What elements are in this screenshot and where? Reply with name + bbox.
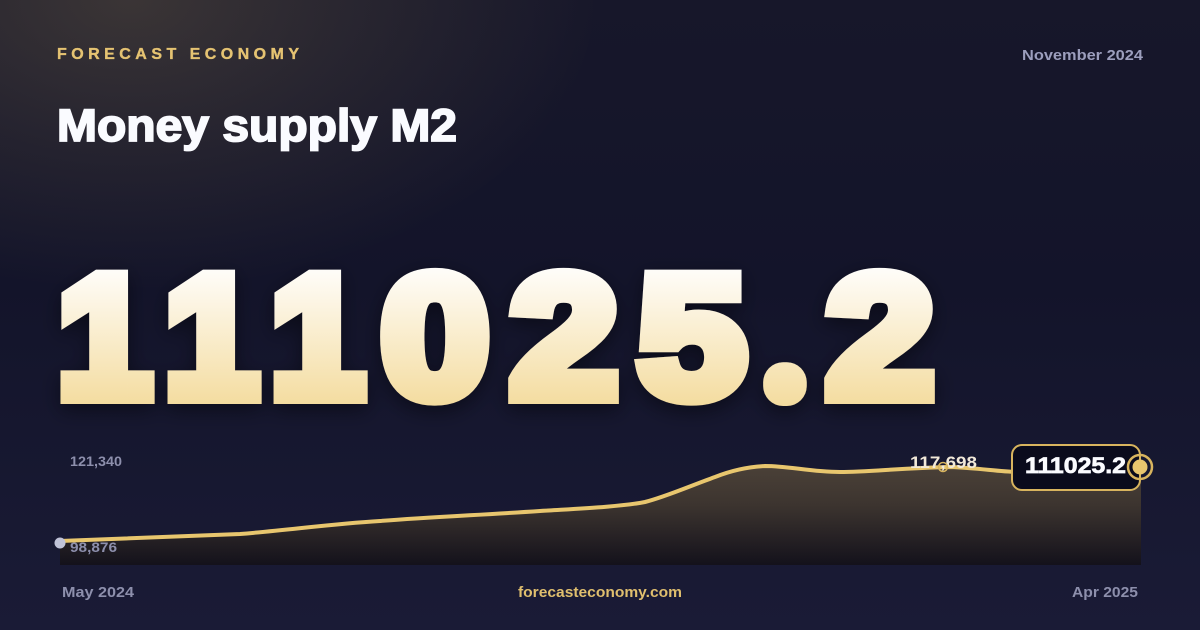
current value badge [1012,445,1140,490]
peak marker [938,462,948,472]
big value [58,241,934,433]
website: forecasteconomy.com [518,585,682,601]
peak value label: 117,698 [910,453,977,472]
big value: . [782,364,788,392]
big value: 025 [381,241,746,433]
brand label: FORECAST ECONOMY [57,46,299,63]
chart area fill [60,466,1141,565]
current value marker [1128,455,1152,479]
axis min label: 98,876 [70,540,118,555]
start point [54,538,66,548]
big value: 111 [58,241,365,433]
big value: 2 [826,241,934,433]
title: Money supply M2 [57,100,457,151]
chart line [60,466,1020,541]
current value badge: 111025.2 [1025,453,1126,478]
date: November 2024 [1022,47,1144,64]
axis max label: 121,340 [70,454,122,469]
area chart [54,466,1141,565]
end date: Apr 2025 [1072,585,1138,601]
start date: May 2024 [62,585,134,601]
